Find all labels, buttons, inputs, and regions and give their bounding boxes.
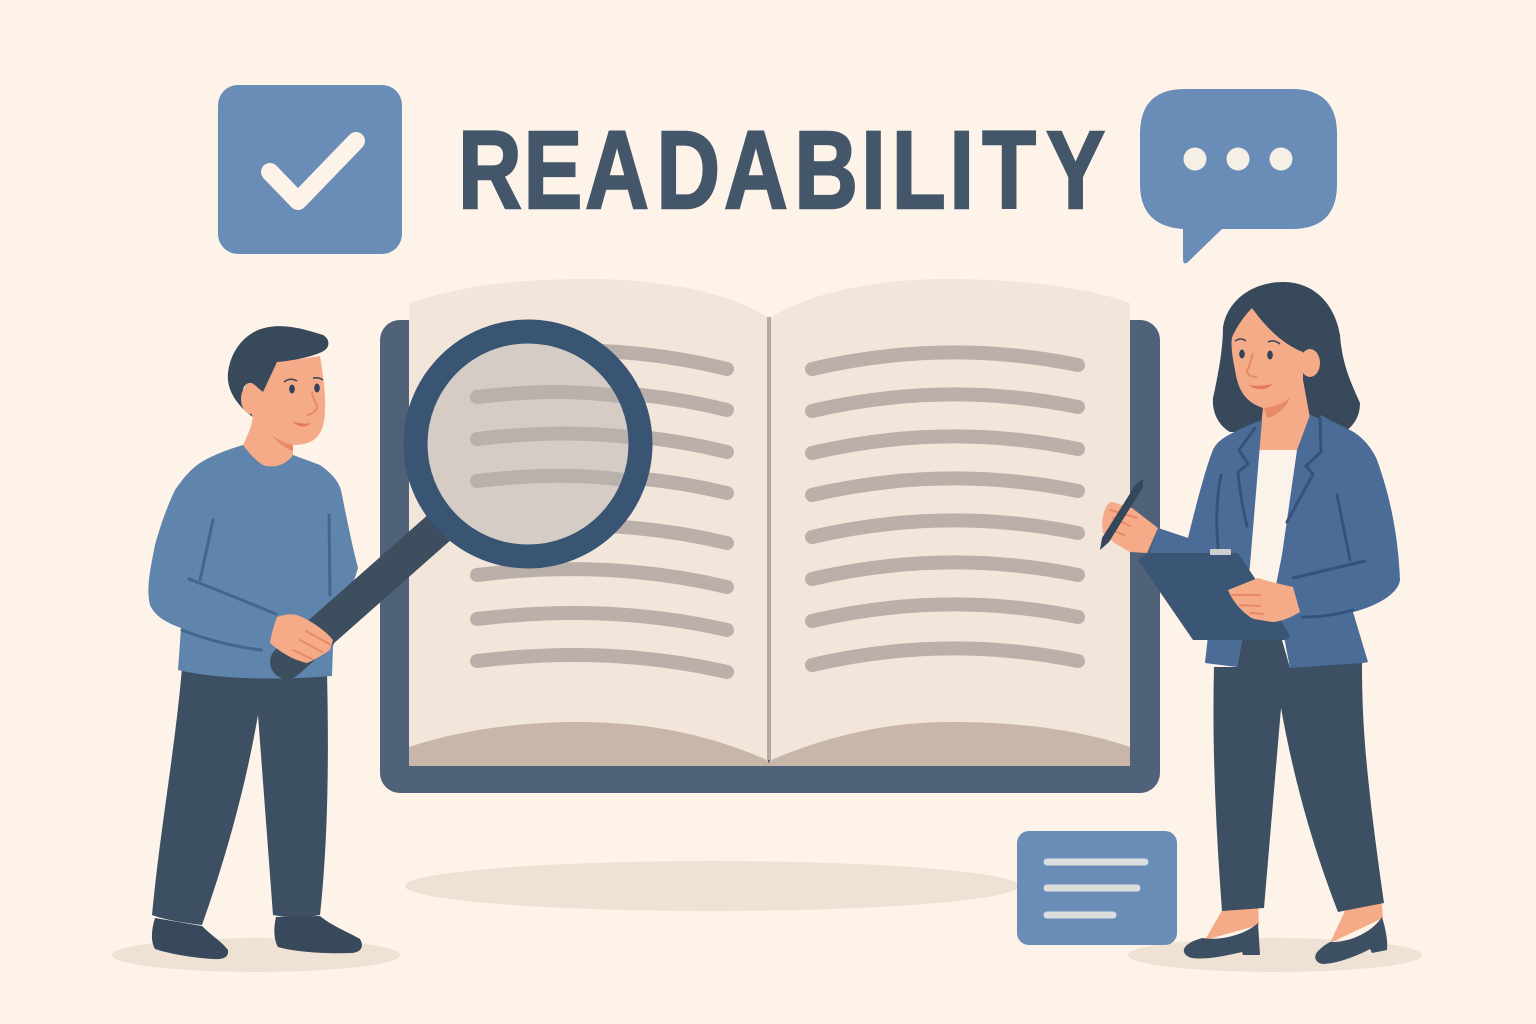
right hand holding clipboard [1228,578,1300,622]
lens lines [477,392,628,481]
book cover frame [380,320,1160,793]
right page [770,279,1130,766]
right page text lines [812,352,1078,665]
left page text lines [477,350,727,672]
jaw shadow [272,435,293,451]
trousers [1213,640,1384,912]
white shirt [1250,450,1298,585]
handle [287,518,450,662]
jacket right panel fill [1275,415,1400,669]
sweater creases [182,515,330,650]
left foot [1205,900,1259,940]
eyes and brows [1235,339,1280,360]
man figure [148,326,362,959]
clipboard clip [1210,549,1231,555]
note card [1017,831,1177,945]
floor shadow under man [112,938,400,972]
title: READABILITY [458,110,1105,232]
jacket left panel fill [1150,420,1262,667]
eyes and brows [284,378,323,394]
mouth [292,421,311,427]
ring [416,332,640,556]
hair [228,326,328,417]
pen [1100,479,1143,550]
right page bottom edge [767,722,1130,766]
woman figure [1100,282,1400,964]
neck and face [243,356,325,466]
left shoe [152,918,228,959]
mouth [1248,384,1273,389]
nose [1247,353,1257,377]
right foot [1330,895,1383,943]
sweater [148,445,358,678]
right shoe [274,916,362,953]
clipboard [1138,553,1289,640]
finger lines [1110,510,1137,535]
lens [427,343,629,545]
hair front [1250,285,1318,352]
jacket creases [1217,418,1365,617]
trousers [152,668,328,925]
open book [380,279,1160,793]
icon: speech bubble [1140,89,1337,263]
left page [409,279,768,766]
book spine [767,317,771,760]
ear [241,384,261,414]
left page bottom edge [409,722,771,766]
face and neck [1232,308,1310,452]
floor shadow under book [405,861,1019,911]
jacket [1150,415,1400,669]
magnifying glass [287,332,640,662]
icon: checkmark badge [218,85,402,254]
floor shadow under woman [1128,938,1422,972]
man's hand on handle [270,614,333,663]
left hand [1102,502,1158,553]
neck shadow [1264,397,1290,418]
nose [307,392,317,415]
left shoe [1184,923,1260,959]
ear [1300,349,1320,377]
right shoe [1315,917,1387,964]
hair back [1213,282,1360,432]
